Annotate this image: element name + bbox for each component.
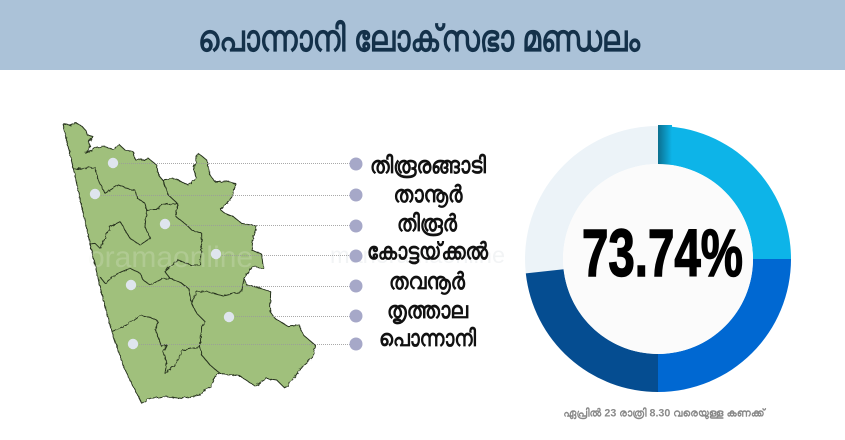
dot: Tirurangadi — [108, 158, 118, 168]
dot: Tanur — [90, 189, 100, 199]
dot: Thrithala — [224, 312, 234, 322]
segment boundaries — [73, 167, 244, 373]
label: Tirur: തിരൂർ — [397, 210, 458, 237]
watermark over map: oramaonline — [88, 241, 253, 274]
header band — [0, 0, 845, 70]
label: Ponnani: പൊന്നാനി — [379, 325, 477, 351]
title: പൊന്നാനി ലോക്‌സഭാ മണ്ഡലം — [198, 18, 641, 59]
leader line: Ponnani — [133, 344, 350, 346]
leader line: Thavanur — [131, 286, 350, 288]
leader line: Tirur — [165, 224, 350, 226]
map outline — [63, 123, 315, 403]
leader lines — [95, 164, 350, 344]
legend markers — [350, 158, 362, 350]
donut segment: remainder — [525, 126, 658, 273]
leader line: Tirurangadi — [113, 162, 350, 164]
constituency labels — [367, 152, 489, 351]
turnout percentage: 73.74% — [582, 216, 743, 291]
donut segment: medium blue — [658, 259, 791, 392]
label: Thrithala: തൃത്താല — [387, 297, 469, 325]
donut segment: dark blue — [526, 269, 658, 392]
map location dots — [90, 158, 234, 349]
watermark — [88, 241, 775, 274]
donut fold shading — [658, 125, 672, 166]
footnote: ഏപ്രിൽ 23 രാത്രി 8.30 വരെയുള്ള കണക്ക് — [563, 406, 767, 420]
label: Tanur: താനൂർ — [394, 181, 463, 208]
label: Thavanur: തവനൂർ — [389, 268, 466, 295]
legend marker 6 — [350, 310, 362, 322]
leader line: Thrithala — [229, 316, 350, 318]
donut centre — [563, 164, 753, 354]
watermark centre: manoramaonline — [330, 242, 505, 268]
leader line: Tanur — [95, 194, 350, 196]
label: Kottakkal: കോട്ടയ്‌ക്കൽ — [367, 238, 489, 265]
legend marker 1 — [350, 158, 362, 170]
label: Tirurangadi: തിരൂരങ്ങാടി — [370, 152, 487, 179]
legend marker 5 — [350, 280, 362, 292]
turnout donut chart — [525, 125, 791, 392]
watermark right: ine — [742, 241, 775, 269]
legend marker 2 — [350, 188, 362, 202]
donut segment: light blue — [658, 126, 791, 259]
map of assembly segments — [63, 123, 315, 403]
dot: Kottakkal — [211, 249, 221, 259]
legend marker 7 — [350, 338, 362, 350]
legend marker 3 — [350, 220, 362, 232]
dot: Tirur — [160, 219, 170, 229]
leader line: Kottakkal — [216, 254, 350, 256]
legend marker 4 — [350, 250, 362, 262]
dot: Ponnani — [128, 339, 138, 349]
dot: Thavanur — [126, 280, 136, 290]
